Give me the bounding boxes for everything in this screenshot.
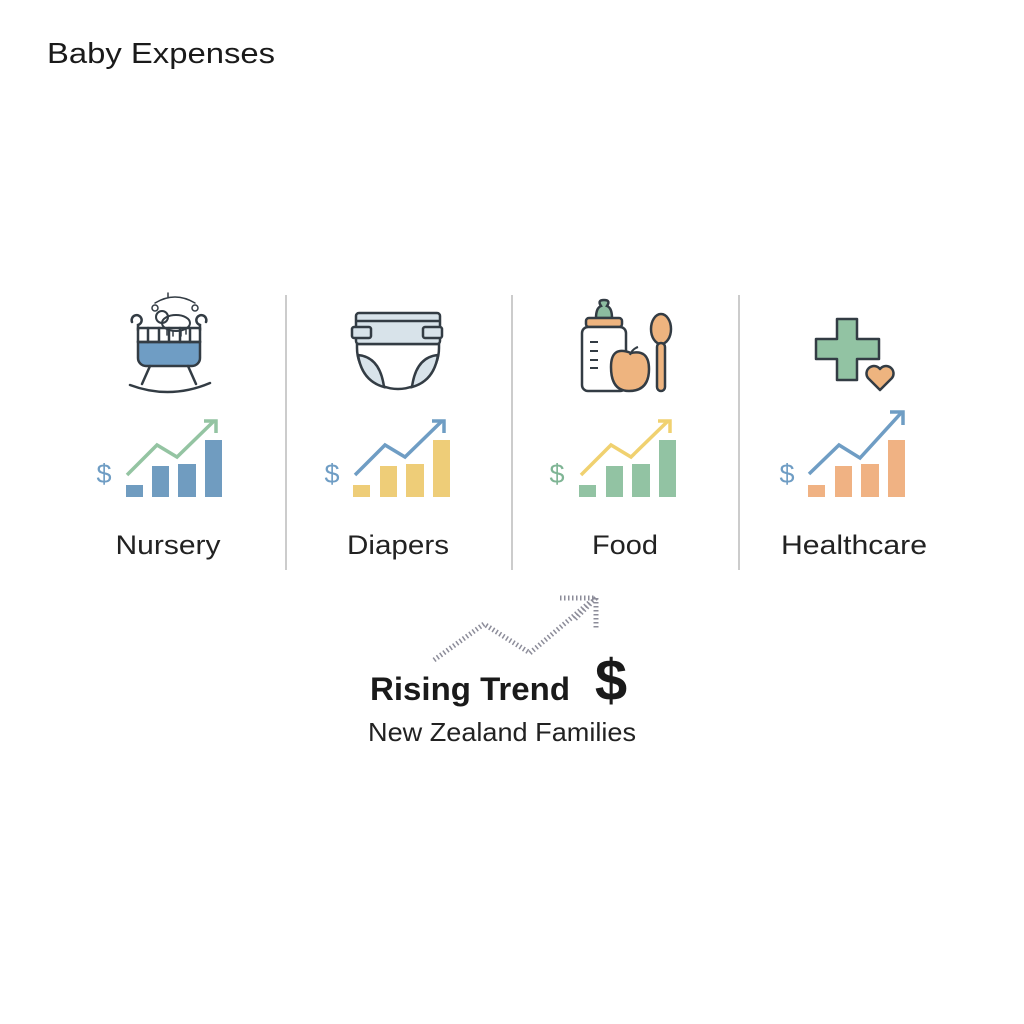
- bar chart: diapers: [324, 421, 450, 497]
- icon: crib: [130, 293, 210, 392]
- label: diapers: Diapers: [347, 530, 449, 560]
- bar chart: nursery: [96, 421, 222, 497]
- icon: medical cross and heart: [816, 319, 894, 390]
- bar chart: healthcare: [779, 412, 905, 497]
- bar chart: food: [549, 421, 676, 497]
- heading: rising trend: Rising Trend: [370, 671, 570, 707]
- label: food: Food: [592, 530, 658, 560]
- bar chart: nursery: $: [96, 459, 112, 489]
- bar chart: food: $: [549, 459, 565, 489]
- bar chart: diapers: $: [324, 459, 340, 489]
- icon: bottle, apple, spoon: [582, 300, 671, 391]
- panel: nursery: [96, 293, 222, 560]
- subtitle: New Zealand Families: [368, 717, 636, 747]
- bar chart: healthcare: $: [779, 459, 795, 489]
- label: healthcare: Healthcare: [781, 530, 927, 560]
- panel: food: [549, 300, 676, 560]
- arrow: dotted rising trend: [434, 598, 596, 660]
- icon: diaper: [352, 313, 442, 389]
- panel: healthcare: [779, 319, 927, 560]
- panel: diapers: [324, 313, 450, 560]
- title: Baby Expenses: [47, 38, 275, 70]
- label: nursery: Nursery: [116, 530, 221, 560]
- icon: dollar sign: $: [595, 648, 627, 713]
